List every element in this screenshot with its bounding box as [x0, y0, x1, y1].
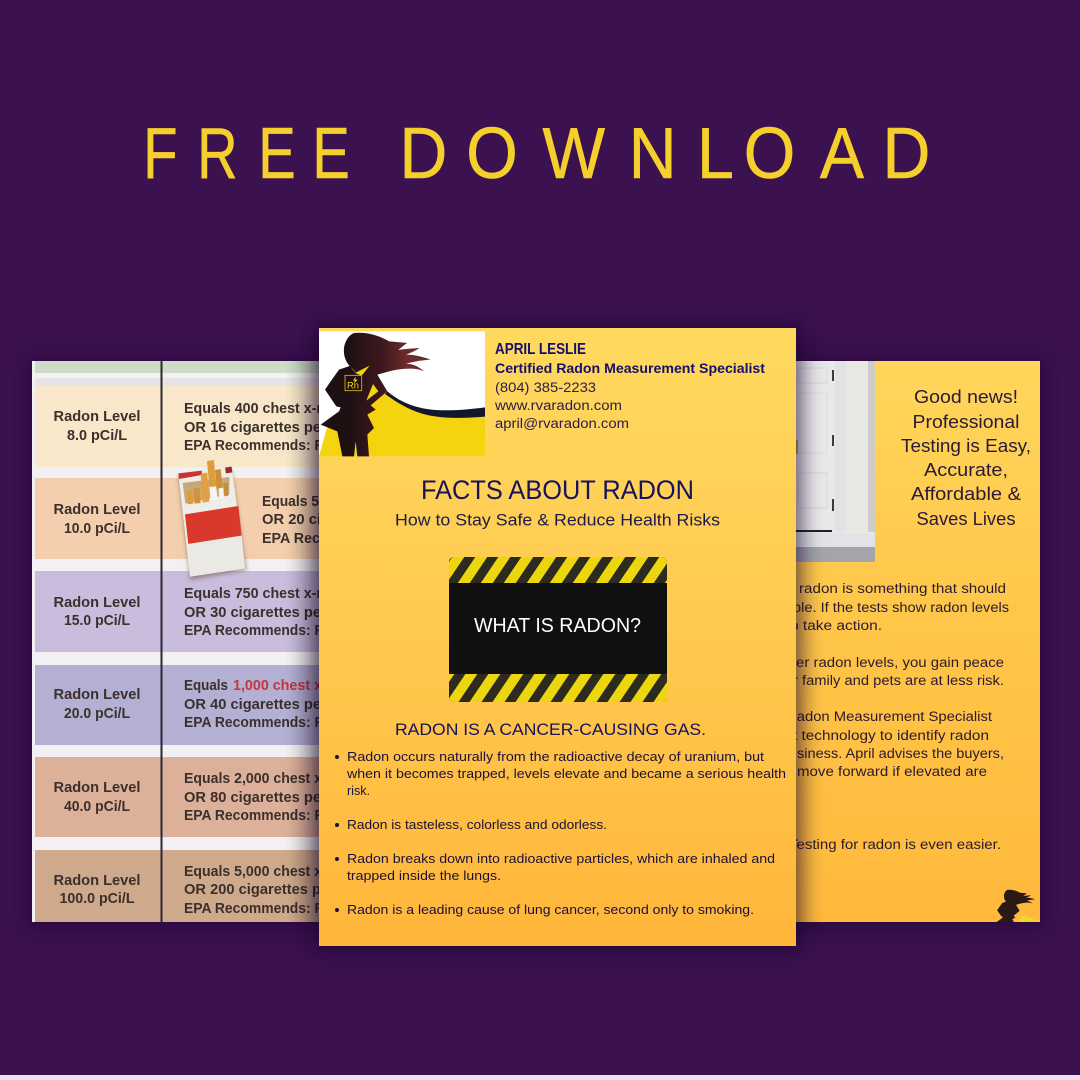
row: 8.0 pCi/L: Equals 400 chest x-r — [184, 400, 322, 417]
heading: good news: Affordable & — [911, 483, 1022, 504]
contact details: april@rvaradon.com — [495, 416, 629, 431]
text block: testing details: radon is something that should — [799, 581, 1006, 596]
text block: testing details: Radon Measurement Specialist — [786, 709, 992, 724]
text block: testing details: Testing for radon is even easier. — [789, 837, 1001, 852]
row: 40.0 pCi/L: 40.0 pCi/L — [64, 798, 130, 815]
text block: testing details: t technology to identify radon — [793, 728, 989, 743]
bullet list — [335, 749, 786, 917]
row: 40.0 pCi/L: Radon Level — [54, 779, 140, 796]
row: 8.0 pCi/L: 8.0 pCi/L — [67, 427, 127, 444]
row: 8.0 pCi/L — [35, 386, 323, 467]
bottom strip — [0, 1075, 1080, 1080]
title — [143, 112, 930, 194]
text block: testing details: move forward if elevated are — [797, 764, 987, 779]
heading: facts about radon: FACTS ABOUT RADON — [421, 475, 694, 505]
subheading: How to Stay Safe & Reduce Health Risks — [395, 512, 720, 530]
row: 10.0 pCi/L: OR 20 ci — [262, 511, 321, 528]
text block: testing details: siness. April advises the buyers, — [797, 746, 1004, 761]
row: 8.0 pCi/L: EPA Recommends: F — [184, 437, 323, 454]
heading: good news: Professional — [912, 411, 1020, 432]
panel: radon level chart — [26, 358, 326, 928]
heading: good news — [901, 386, 1031, 529]
panel: good news page — [786, 358, 1046, 934]
row: 15.0 pCi/L: Radon Level — [54, 594, 140, 611]
contact details: APRIL LESLIE — [495, 341, 586, 358]
row: 10.0 pCi/L: 10.0 pCi/L — [64, 520, 130, 537]
row: 20.0 pCi/L: EPA Recommends: F — [184, 714, 323, 731]
row: 10.0 pCi/L: EPA Rec — [262, 530, 320, 547]
bullet list: Radon is tasteless, colorless and odorless. — [347, 817, 607, 832]
row: 40.0 pCi/L: Equals 2,000 chest x — [184, 770, 323, 787]
row: 15.0 pCi/L: EPA Recommends: F — [184, 622, 323, 639]
title: FREE — [143, 113, 350, 194]
row: 20.0 pCi/L — [35, 665, 323, 745]
heading: good news: Saves Lives — [916, 508, 1016, 529]
contact details: (804) 385-2233 — [495, 380, 596, 395]
photo: front door — [796, 361, 875, 562]
row: 20.0 pCi/L: Radon Level — [54, 686, 140, 703]
row: 10.0 pCi/L: Equals 5 — [262, 493, 319, 510]
contact details: www.rvaradon.com — [494, 398, 622, 413]
row: 20.0 pCi/L: 1,000 chest x — [233, 677, 323, 694]
row: 40.0 pCi/L — [35, 757, 323, 837]
row: 40.0 pCi/L: EPA Recommends: F — [184, 807, 323, 824]
row: 100.0 pCi/L: Equals 5,000 chest x — [184, 863, 323, 880]
logo: radon heroine — [319, 331, 485, 456]
row: 20.0 pCi/L: OR 40 cigarettes pe — [184, 696, 321, 713]
text block: testing details — [786, 581, 1009, 852]
text block: testing details: ple. If the tests show radon levels — [793, 600, 1009, 615]
row: 100.0 pCi/L: EPA Recommends: F — [184, 900, 323, 917]
row: 100.0 pCi/L: Radon Level — [54, 872, 140, 889]
callout: what is radon hazard sign: WHAT IS RADON? — [474, 615, 641, 637]
row: 100.0 pCi/L: OR 200 cigarettes p — [184, 881, 321, 898]
bullet list: Radon is a leading cause of lung cancer, second only to smoking. — [347, 902, 754, 917]
icon: small heroine logo — [996, 890, 1040, 922]
row: 100.0 pCi/L — [35, 850, 323, 922]
logo: radon heroine: Rn — [347, 381, 359, 391]
bullet list: risk. — [347, 783, 370, 798]
text block: testing details: o take action. — [790, 618, 882, 633]
contact details — [494, 341, 766, 431]
row: 15.0 pCi/L: OR 30 cigarettes pe — [184, 604, 321, 621]
title: DOWNLOAD — [400, 112, 930, 194]
bullet list: Radon breaks down into radioactive particles, which are inhaled and — [347, 851, 775, 866]
text block: testing details: er radon levels, you gain peace — [796, 655, 1004, 670]
row: 10.0 pCi/L — [35, 478, 321, 559]
row: 20.0 pCi/L: 20.0 pCi/L — [64, 705, 130, 722]
callout: what is radon hazard sign — [449, 557, 667, 702]
heading: good news: Good news! — [914, 386, 1018, 407]
bullet list: Radon occurs naturally from the radioactive decay of uranium, but — [347, 749, 764, 764]
row: 10.0 pCi/L: Radon Level — [54, 501, 140, 518]
row: 15.0 pCi/L: Equals 750 chest x-r — [184, 585, 322, 602]
text block: testing details: r family and pets are at less risk. — [793, 673, 1004, 688]
contact details: Certified Radon Measurement Specialist — [495, 361, 766, 376]
row: 15.0 pCi/L — [35, 571, 323, 652]
heading: good news: Testing is Easy, — [901, 435, 1031, 456]
heading: cancer-causing gas: RADON IS A CANCER-CAUSING GAS. — [395, 721, 706, 739]
row: 8.0 pCi/L: Radon Level — [54, 408, 140, 425]
row: 100.0 pCi/L: 100.0 pCi/L — [60, 890, 134, 907]
bullet list: trapped inside the lungs. — [347, 868, 501, 883]
row: 40.0 pCi/L: OR 80 cigarettes pe — [184, 789, 321, 806]
panel: facts about radon page — [313, 325, 803, 951]
row: 15.0 pCi/L: 15.0 pCi/L — [64, 612, 130, 629]
row: 8.0 pCi/L: OR 16 cigarettes pe — [184, 419, 321, 436]
heading: good news: Accurate, — [924, 459, 1008, 480]
bullet list: when it becomes trapped, levels elevate and became a serious health — [346, 766, 786, 781]
row: 20.0 pCi/L: Equals — [184, 677, 228, 694]
icon: cigarette pack — [178, 460, 247, 580]
